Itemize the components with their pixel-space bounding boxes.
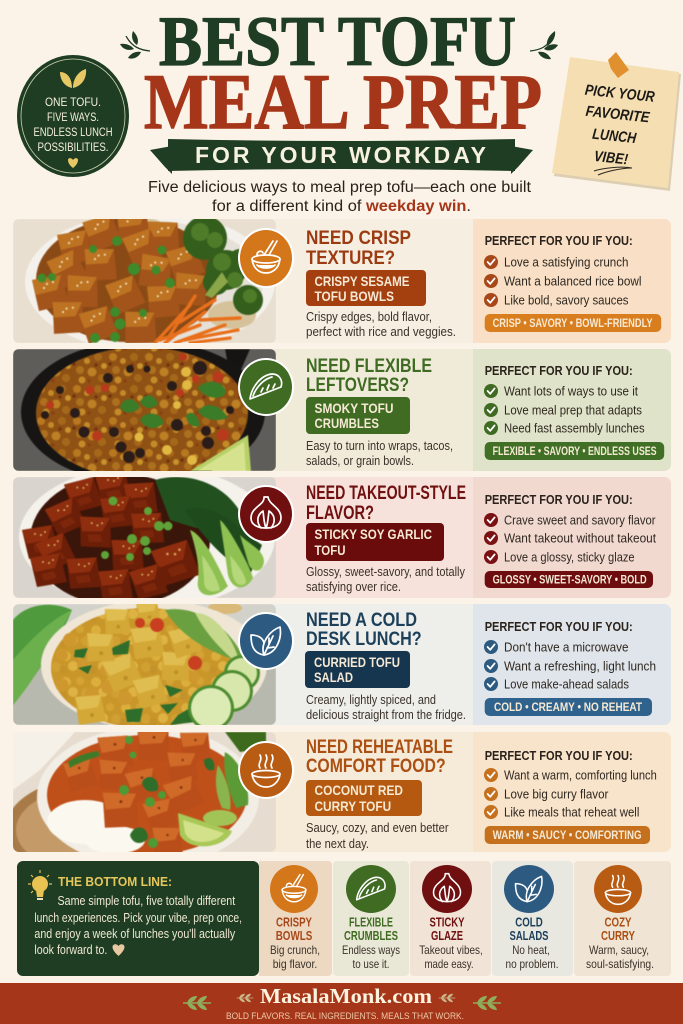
checklist: Need fast assembly lunches [504, 420, 645, 436]
icon: garlic [238, 485, 294, 543]
recipe tag: SMOKY TOFU [314, 400, 394, 416]
brand name: MasalaMonk.com [260, 984, 433, 1008]
tags pill [485, 698, 652, 716]
checklist: Love meal prep that adapts [504, 402, 642, 418]
icon: leaves [60, 69, 86, 88]
tile: cozy curry: CURRY [601, 929, 636, 943]
icon: leaf [238, 612, 294, 670]
subtitle: for a different kind of weekday win . [212, 198, 471, 215]
checklist [484, 748, 657, 820]
tile: crispy bowls [259, 861, 332, 976]
tile: sticky glaze [410, 861, 491, 976]
title line: best tofu: BEST TOFU [159, 3, 516, 81]
icon: lightbulb [28, 870, 52, 900]
badge: one tofu five ways: ENDLESS LUNCH [34, 127, 112, 139]
checklist: PERFECT FOR YOU IF YOU: [485, 233, 633, 248]
badge: one tofu five ways: POSSIBILITIES. [38, 142, 108, 154]
heading [306, 355, 432, 396]
tagline: BOLD FLAVORS. REAL INGREDIENTS. MEALS THAT WORK. [226, 1011, 464, 1022]
heading [306, 609, 422, 650]
panel: smoky tofu crumbles [13, 349, 671, 471]
description: salads, or grain bowls. [306, 453, 414, 468]
recipe tag: TOFU BOWLS [314, 288, 394, 304]
panel: coconut red curry tofu [13, 732, 671, 852]
description: Saucy, cozy, and even better [306, 820, 449, 835]
tile: crispy bowls: BOWLS [276, 929, 312, 943]
recipe tag: SALAD [314, 669, 353, 685]
heading: TEXTURE? [306, 247, 395, 269]
checklist: Want takeout without takeout [504, 530, 656, 546]
checklist: Want a refreshing, light lunch [504, 658, 656, 674]
subtitle: Five delicious ways to meal prep tofu—each one built [148, 179, 532, 196]
tile: flexible crumbles: Endless ways [342, 943, 400, 957]
heading: NEED FLEXIBLE [306, 355, 432, 377]
heading: LEFTOVERS? [306, 374, 409, 396]
tile: sticky glaze: Takeout vibes, [419, 943, 483, 957]
heading [306, 482, 466, 524]
checklist: Love make-ahead salads [504, 676, 629, 692]
heading: FLAVOR? [306, 502, 374, 524]
ribbon banner: FOR YOUR WORKDAY [195, 142, 486, 168]
tags pill: WARM • SAUCY • COMFORTING [493, 830, 642, 842]
sticky note: VIBE! [593, 148, 629, 168]
description: delicious straight from the fridge. [306, 707, 466, 722]
checklist: Love a glossy, sticky glaze [504, 550, 635, 564]
tile: flexible crumbles [333, 861, 409, 976]
body text [34, 894, 242, 957]
checklist: PERFECT FOR YOU IF YOU: [485, 748, 633, 763]
tile: cold salads [492, 861, 573, 976]
tile: cozy curry: Warm, saucy, [589, 943, 649, 957]
checklist: Love big curry flavor [504, 786, 609, 802]
tags pill: COLD • CREAMY • NO REHEAT [494, 702, 642, 714]
tile: cold salads: no problem. [506, 957, 558, 971]
icon: tape [608, 52, 629, 78]
photo: curry bowl [13, 732, 276, 852]
photo: curried tofu salad bowl [13, 600, 276, 731]
panel: curried tofu salad [13, 600, 671, 731]
badge: one tofu five ways: ONE TOFU. [45, 97, 101, 109]
recipe tag: CRISPY SESAME [314, 273, 410, 289]
badge: one tofu five ways: FIVE WAYS. [47, 112, 99, 124]
description: Glossy, sweet-savory, and totally [306, 564, 465, 579]
heading: COMFORT FOOD? [306, 755, 446, 777]
tile: crispy bowls: Big crunch, [270, 943, 320, 957]
recipe tag: TOFU [314, 542, 346, 558]
badge: one tofu five ways [17, 55, 129, 177]
recipe tag [306, 780, 422, 816]
subtitle [148, 179, 532, 215]
description: perfect with rice and veggies. [306, 324, 456, 339]
panel: sticky soy garlic tofu [13, 477, 671, 598]
description: the next day. [306, 836, 369, 851]
title line: meal prep: MEAL PREP [144, 58, 542, 145]
photo: sesame tofu bowl [13, 219, 276, 343]
description: Crispy edges, bold flavor, [306, 309, 432, 324]
icon: steaming bowl [238, 741, 294, 799]
heading: THE BOTTOM LINE: [58, 874, 172, 889]
recipe tag: COCONUT RED [314, 782, 403, 798]
icon: heart [68, 158, 78, 168]
checklist: Want a warm, comforting lunch [504, 768, 657, 782]
icon: left sprig [120, 31, 150, 59]
checklist [484, 492, 656, 564]
panel: crispy sesame tofu bowls [13, 219, 671, 343]
checklist: Love a satisfying crunch [504, 254, 628, 270]
tile: sticky glaze: GLAZE [431, 929, 463, 943]
recipe tag: CURRY TOFU [314, 798, 391, 814]
sticky note: PICK YOUR [584, 82, 656, 106]
checklist: PERFECT FOR YOU IF YOU: [485, 363, 633, 378]
checklist: Crave sweet and savory flavor [504, 512, 656, 528]
heading: NEED CRISP [306, 227, 411, 249]
heading: NEED A COLD [306, 609, 417, 631]
tile: sticky glaze: STICKY [430, 916, 465, 930]
body text: and enjoy a week of lunches you'll actually [34, 927, 236, 941]
sticky note: LUNCH [592, 126, 638, 147]
tile: cozy curry [574, 861, 671, 976]
heading: NEED REHEATABLE [306, 736, 453, 758]
footer sprigs [183, 994, 501, 1010]
body text: Same simple tofu, five totally different [58, 894, 236, 908]
tile: cozy curry: COZY [604, 916, 632, 930]
checklist [484, 233, 642, 308]
description [306, 438, 453, 468]
icon: right sprig [530, 31, 558, 59]
tile: cold salads: SALADS [510, 929, 548, 943]
tile: cozy curry: soul-satisfying. [586, 957, 654, 971]
photo: sticky tofu bowl [13, 477, 276, 598]
tile: cold salads: COLD [515, 916, 543, 930]
tags pill [485, 571, 653, 588]
tile: crispy bowls: CRISPY [276, 916, 313, 930]
tile: cold salads: No heat, [512, 943, 550, 957]
description [306, 309, 456, 339]
heading: DESK LUNCH? [306, 628, 422, 650]
heading: NEED TAKEOUT-STYLE [306, 482, 466, 504]
tile: crispy bowls: big flavor. [273, 957, 317, 971]
panel: the bottom line [17, 861, 259, 976]
description [306, 820, 449, 851]
recipe tag: CRUMBLES [314, 415, 379, 431]
title [144, 3, 542, 145]
footer [0, 983, 683, 1024]
checklist: Want lots of ways to use it [504, 384, 638, 398]
heading [306, 227, 411, 269]
checklist: Don't have a microwave [504, 640, 628, 654]
recipe tag: STICKY SOY GARLIC [314, 526, 432, 542]
photo: crumbles in skillet [13, 349, 276, 471]
heading [306, 736, 453, 777]
tile: flexible crumbles: to use it. [352, 957, 390, 971]
sticky note: FAVORITE [585, 103, 651, 127]
tile: flexible crumbles: CRUMBLES [344, 929, 398, 943]
body text: lunch experiences. Pick your vibe, prep once, [34, 911, 242, 925]
tags pill [485, 826, 650, 844]
tags pill [485, 314, 661, 332]
recipe tag [306, 523, 444, 561]
ribbon banner [150, 139, 533, 174]
recipe tag [305, 651, 410, 688]
icon: taco [238, 358, 294, 416]
icon: heart [112, 944, 124, 956]
checklist: Like bold, savory sauces [504, 292, 629, 308]
description: satisfying over rice. [306, 579, 401, 594]
recipe tag [306, 270, 426, 306]
tile: flexible crumbles: FLEXIBLE [349, 916, 393, 930]
description: Easy to turn into wraps, tacos, [306, 438, 453, 453]
summary tiles [259, 861, 671, 976]
checklist: Like meals that reheat well [504, 804, 639, 820]
tags pill: GLOSSY • SWEET-SAVORY • BOLD [493, 574, 647, 586]
description [306, 564, 465, 594]
description: Creamy, lightly spiced, and [306, 692, 436, 707]
tags pill [485, 442, 664, 460]
checklist: PERFECT FOR YOU IF YOU: [485, 492, 633, 507]
checklist: Want a balanced rice bowl [504, 274, 642, 288]
description [306, 692, 466, 722]
recipe tag: CURRIED TOFU [314, 654, 400, 670]
body text: look forward to. [34, 943, 107, 957]
recipe tag [306, 397, 410, 434]
checklist [484, 619, 656, 692]
checklist [484, 363, 645, 436]
tile: sticky glaze: made easy. [424, 957, 474, 971]
sticky note [552, 52, 681, 191]
icon: rice bowl [238, 228, 294, 288]
checklist: PERFECT FOR YOU IF YOU: [485, 619, 633, 634]
